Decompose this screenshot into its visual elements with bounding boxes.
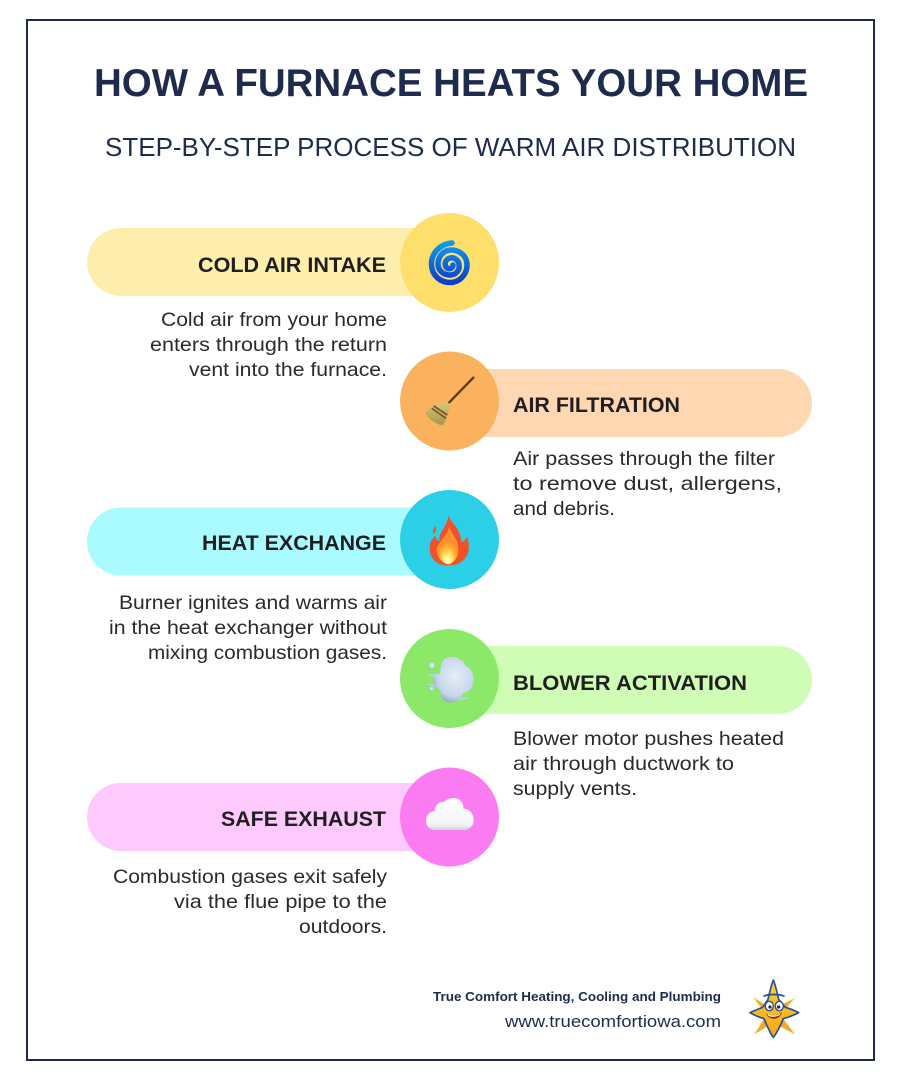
text: heat exchange description — [109, 592, 388, 664]
icon: cloud — [426, 798, 474, 830]
icon: blue spiral — [431, 243, 467, 282]
pill: blower activation — [440, 646, 812, 714]
step 2: air filtration — [400, 352, 812, 520]
circle: heat exchange — [400, 490, 499, 589]
icon: flame — [430, 515, 469, 565]
text: blower activation description: air through ductwork to — [513, 753, 734, 775]
icon: puff of air — [426, 657, 474, 702]
text: safe exhaust description — [113, 866, 387, 938]
step 3: heat exchange — [87, 490, 499, 664]
pill: heat exchange — [87, 508, 460, 576]
text: safe exhaust description: outdoors. — [299, 916, 387, 938]
pill: air filtration — [440, 369, 812, 437]
text: heat exchange description: Burner ignites and warms air — [119, 592, 388, 614]
footer company name: True Comfort Heating, Cooling and Plumbing — [433, 990, 721, 1004]
circle: air filtration — [400, 352, 499, 450]
footer website: www.truecomfortiowa.com — [504, 1013, 721, 1031]
heading: safe exhaust: SAFE EXHAUST — [221, 807, 386, 831]
heading: cold air intake: COLD AIR INTAKE — [198, 253, 386, 277]
text: air filtration description: Air passes through the filter — [513, 448, 776, 470]
circle: blower activation — [400, 629, 499, 728]
circle: cold air intake — [400, 213, 499, 312]
heading: heat exchange: HEAT EXCHANGE — [202, 531, 386, 555]
subtitle: STEP-BY-STEP PROCESS OF WARM AIR DISTRIBUTION — [105, 132, 796, 162]
text: blower activation description: supply vents. — [513, 778, 637, 800]
text: blower activation description: Blower motor pushes heated — [513, 728, 784, 750]
circle: safe exhaust — [400, 768, 499, 866]
text: cold air intake description: enters through the return — [150, 334, 387, 356]
text: cold air intake description — [150, 309, 387, 381]
step 5: safe exhaust — [87, 768, 499, 938]
heading: blower activation: BLOWER ACTIVATION — [513, 671, 747, 695]
text: air filtration description: to remove dust, allergens, — [513, 473, 782, 495]
text: safe exhaust description: via the flue pipe to the — [174, 891, 387, 913]
icon: star mascot logo — [750, 980, 799, 1037]
text: cold air intake description: vent into the furnace. — [189, 359, 387, 381]
step 4: blower activation — [400, 629, 812, 800]
pill: safe exhaust — [87, 783, 460, 851]
title: HOW A FURNACE HEATS YOUR HOME — [94, 62, 808, 105]
text: heat exchange description: mixing combustion gases. — [148, 642, 387, 664]
text: air filtration description: and debris. — [513, 498, 615, 520]
step 1: cold air intake — [87, 213, 499, 381]
text: cold air intake description: Cold air from your home — [161, 309, 387, 331]
heading: air filtration: AIR FILTRATION — [513, 393, 680, 417]
pill: cold air intake — [87, 228, 460, 296]
text: air filtration description — [513, 448, 782, 520]
text: heat exchange description: in the heat exchanger without — [109, 617, 388, 639]
icon: broom — [425, 378, 473, 425]
text: blower activation description — [513, 728, 784, 800]
text: safe exhaust description: Combustion gases exit safely — [113, 866, 387, 888]
